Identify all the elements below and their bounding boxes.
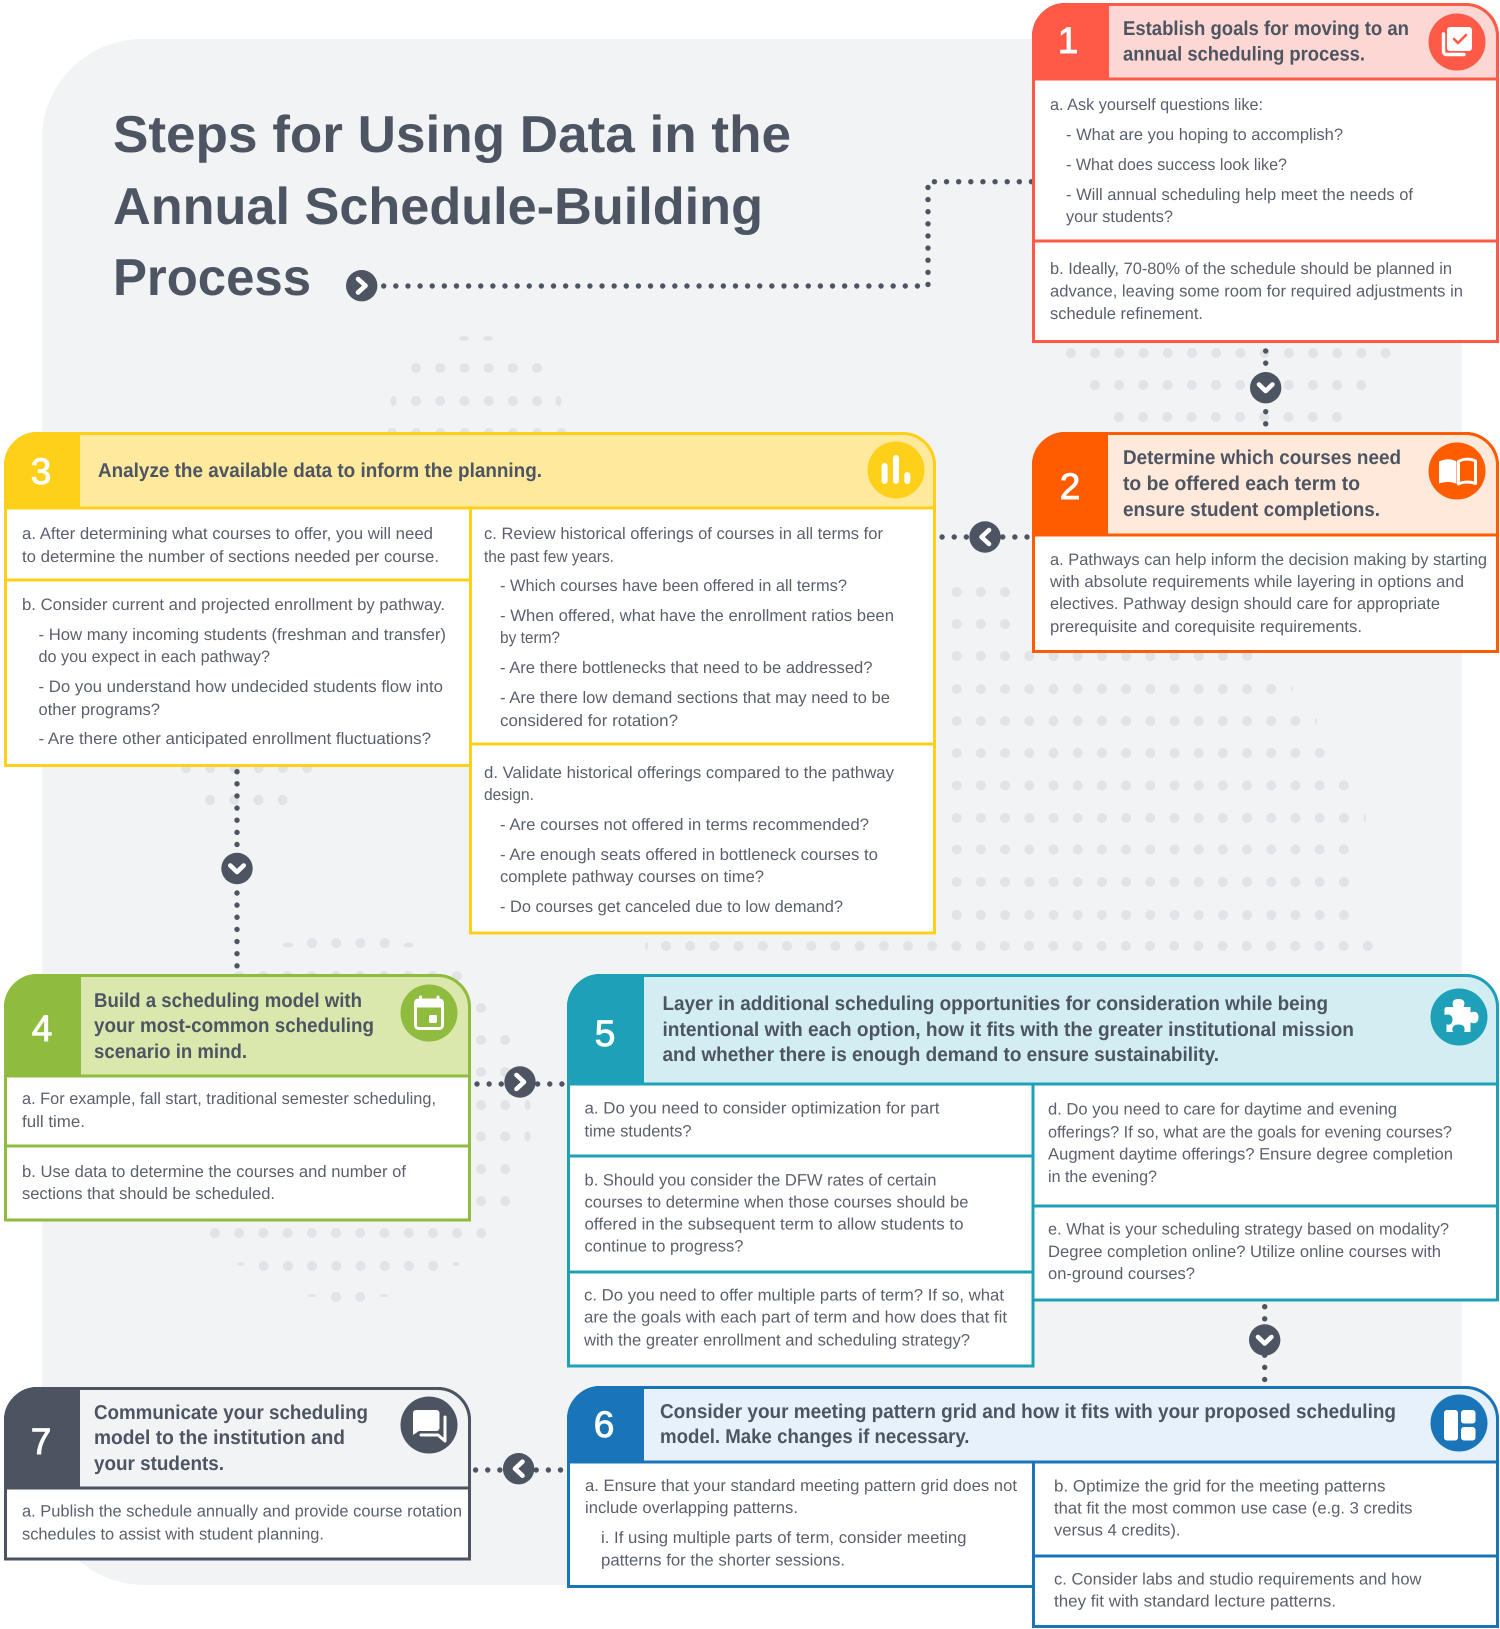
step 3 text d (484, 764, 895, 916)
step 1 text a: - What are you hoping to accomplish? (1066, 126, 1343, 144)
step 5 heading (662, 993, 1354, 1066)
step 4 heading (94, 990, 374, 1063)
step 1 number block (1034, 4, 1108, 79)
step 5 text d: Augment daytime offerings? Ensure degree completion (1048, 1146, 1453, 1164)
arrow: step 5 to step 6 (1249, 1307, 1280, 1380)
step 5 text e: e. What is your scheduling strategy based on modality? (1048, 1220, 1449, 1238)
step 5 text d (1048, 1100, 1453, 1186)
step 1 frame (1034, 4, 1498, 342)
step 3 text c (484, 525, 894, 730)
step 1 number: 1 (1058, 20, 1078, 61)
step 3 text a: to determine the number of sections needed per course. (22, 548, 439, 566)
title (113, 106, 791, 307)
step 6 header band (568, 1388, 1498, 1462)
step 4 text b (22, 1163, 406, 1203)
step 6 text a: patterns for the shorter sessions. (601, 1552, 845, 1570)
step 6 text b: that fit the most common use case (e.g. 3 credits (1054, 1500, 1412, 1518)
panel: step 7 (6, 1388, 470, 1559)
step 3 text c: - Are there low demand sections that may need to be (500, 689, 890, 707)
step 3 text d: - Are courses not offered in terms recommended? (500, 816, 869, 834)
step 6 text c (1054, 1570, 1422, 1610)
step 5 frame (568, 976, 1498, 1366)
step 2 header band (1034, 434, 1498, 535)
title: Steps for Using Data in the (113, 106, 791, 164)
step 4 frame (6, 976, 470, 1220)
step 7 frame (6, 1388, 470, 1559)
panel: step 3 (6, 434, 934, 933)
step 6 number: 6 (594, 1404, 614, 1445)
step 1 text b: advance, leaving some room for required adjustments in (1050, 283, 1463, 301)
step 7 heading (94, 1402, 368, 1475)
step 3 text b (22, 596, 446, 748)
step 3 text c: c. Review historical offerings of courses in all terms for (484, 525, 883, 543)
step 5 number: 5 (595, 1013, 615, 1054)
step 3 text d: - Are enough seats offered in bottleneck courses to (500, 846, 878, 864)
step 2 heading: Determine which courses need (1123, 447, 1401, 469)
step 1 text a: your students? (1066, 208, 1173, 226)
step 1 heading (1123, 18, 1409, 66)
step 5 heading: intentional with each option, how it fits with the greater institutional mission (662, 1019, 1354, 1041)
step 4 text b: b. Use data to determine the courses and number of (22, 1163, 406, 1181)
arrow: step 3 to step 4 (221, 772, 253, 967)
step 5 header band (568, 976, 1498, 1084)
step 3 text b: - Do you understand how undecided students flow into (38, 678, 443, 696)
arrow: step 6 to step 7 (475, 1453, 560, 1484)
step 6 text b: b. Optimize the grid for the meeting patterns (1054, 1478, 1386, 1496)
step 3 text c: the past few years. (484, 548, 614, 566)
step 4 number block (6, 976, 80, 1076)
step 2 heading: ensure student completions. (1123, 499, 1380, 521)
step 7 text a: schedules to assist with student planning. (22, 1526, 324, 1544)
step 5 text b: continue to progress? (584, 1238, 744, 1256)
step 7 heading: model to the institution and (94, 1427, 345, 1449)
step 5 text e: on-ground courses? (1048, 1265, 1195, 1283)
icon: checked copy (1428, 14, 1486, 70)
step 5 text c: are the goals with each part of term and how does that fit (584, 1308, 1007, 1326)
step 3 text b: do you expect in each pathway? (38, 648, 270, 666)
step 6 text a (585, 1477, 1017, 1570)
step 5 text d: in the evening? (1048, 1168, 1157, 1186)
step 1 heading: annual scheduling process. (1123, 44, 1365, 66)
step 5 number block (568, 976, 642, 1084)
step 2 frame (1034, 434, 1498, 652)
step 5 text e (1048, 1220, 1449, 1283)
step 4 number: 4 (32, 1008, 52, 1049)
step 3 heading: Analyze the available data to inform the planning. (98, 460, 542, 482)
step 5 text a: time students? (584, 1122, 692, 1140)
step 6 text c: c. Consider labs and studio requirements and how (1054, 1570, 1422, 1588)
step 4 text a: full time. (22, 1113, 85, 1131)
step 7 number: 7 (31, 1421, 51, 1462)
step 3 text d: d. Validate historical offerings compared to the pathway (484, 764, 895, 782)
step 5 text d: d. Do you need to care for daytime and evening (1048, 1100, 1397, 1118)
panel: step 2 (1034, 434, 1498, 652)
step 1 text a: - What does success look like? (1066, 156, 1287, 174)
step 4 header band (6, 976, 470, 1076)
step 4 text b: sections that should be scheduled. (22, 1185, 275, 1203)
icon: bar chart (868, 442, 924, 498)
step 7 header band (6, 1388, 470, 1488)
step 3 header band (6, 434, 934, 508)
step 4 heading: Build a scheduling model with (94, 990, 362, 1012)
step 5 text c: c. Do you need to offer multiple parts of term? If so, what (584, 1286, 1004, 1304)
step 5 text a: a. Do you need to consider optimization for part (584, 1100, 940, 1118)
panel: step 1 (1034, 4, 1498, 342)
arrow: step 4 to step 5 (477, 1066, 563, 1098)
step 5 text b: courses to determine when those courses should be (584, 1194, 968, 1212)
panel: step 4 (6, 976, 470, 1220)
title: Annual Schedule-Building (113, 178, 763, 236)
step 3 text d: design. (484, 786, 534, 804)
arrow: step 1 to step 2 (1250, 351, 1281, 424)
step 5 text b (584, 1172, 968, 1256)
step 3 text d: - Do courses get canceled due to low demand? (500, 898, 843, 916)
step 2 number: 2 (1060, 466, 1080, 507)
icon: calendar (400, 984, 458, 1042)
step 4 heading: scenario in mind. (94, 1041, 247, 1063)
step 1 text b (1050, 260, 1463, 323)
step 6 heading: Consider your meeting pattern grid and how it fits with your proposed scheduling (660, 1401, 1396, 1423)
arrow: step 2 to step 3 (942, 521, 1027, 553)
step 7 text a: a. Publish the schedule annually and provide course rotation (22, 1502, 462, 1520)
step 2 text a (1049, 551, 1487, 636)
step 3 text c: - Which courses have been offered in all terms? (500, 577, 847, 595)
step 5 text c: with the greater enrollment and scheduling strategy? (583, 1332, 970, 1350)
icon: chat bubbles (400, 1396, 458, 1454)
step 5 text b: b. Should you consider the DFW rates of certain (584, 1172, 936, 1190)
step 7 text a (22, 1502, 462, 1544)
step 2 text a: with absolute requirements while layering in options and (1049, 573, 1464, 591)
step 1 text a (1050, 96, 1413, 226)
step 6 number block (568, 1388, 642, 1462)
step 4 text a: a. For example, fall start, traditional semester scheduling, (22, 1090, 436, 1108)
title: Process (113, 249, 311, 307)
step 3 text a: a. After determining what courses to offer, you will need (22, 525, 433, 543)
icon: layout grid (1430, 1394, 1488, 1452)
step 6 text a: include overlapping patterns. (585, 1499, 798, 1517)
step 3 text d: complete pathway courses on time? (500, 868, 764, 886)
step 5 text e: Degree completion online? Utilize online courses with (1048, 1243, 1441, 1261)
step 5 text c (583, 1286, 1007, 1350)
arrow: title to step 1 (346, 182, 1034, 301)
step 2 heading (1123, 447, 1401, 521)
step 5 text b: offered in the subsequent term to allow students to (584, 1216, 964, 1234)
icon: puzzle piece (1430, 988, 1488, 1046)
step 6 text c: they fit with standard lecture patterns. (1054, 1592, 1336, 1610)
step 1 text a: - Will annual scheduling help meet the needs of (1066, 186, 1413, 204)
step 1 text b: schedule refinement. (1050, 305, 1203, 323)
step 1 header band (1034, 4, 1498, 79)
step 6 text b: versus 4 credits). (1054, 1522, 1180, 1540)
step 3 text c: considered for rotation? (500, 712, 678, 730)
step 3 text a (22, 525, 439, 566)
step 4 text a (22, 1090, 436, 1131)
step 5 text a (584, 1100, 940, 1140)
step 3 text b: other programs? (38, 701, 160, 719)
step 6 text a: i. If using multiple parts of term, consider meeting (601, 1529, 966, 1547)
step 3 text b: - How many incoming students (freshman and transfer) (38, 626, 446, 644)
step 5 text d: offerings? If so, what are the goals for evening courses? (1048, 1124, 1452, 1142)
step 2 text a: electives. Pathway design should care for appropriate (1050, 595, 1440, 613)
step 3 number: 3 (31, 451, 51, 492)
step 3 text c: - Are there bottlenecks that need to be addressed? (500, 659, 872, 677)
step 2 text a: prerequisite and corequisite requirements. (1050, 618, 1362, 636)
step 3 number block (6, 434, 78, 508)
panel: step 5 (568, 976, 1498, 1366)
background dot globes (186, 336, 1386, 1297)
step 3 text c: - When offered, what have the enrollment ratios been (500, 607, 894, 625)
step 3 text b: - Are there other anticipated enrollment fluctuations? (38, 730, 431, 748)
step 1 text a: a. Ask yourself questions like: (1050, 96, 1263, 114)
step 5 heading: Layer in additional scheduling opportunities for consideration while being (662, 993, 1328, 1015)
icon: open book (1428, 442, 1486, 500)
step 6 text a: a. Ensure that your standard meeting pattern grid does not (585, 1477, 1017, 1495)
step 1 text b: b. Ideally, 70-80% of the schedule should be planned in (1050, 260, 1452, 278)
step 6 heading (660, 1401, 1396, 1448)
step 5 heading: and whether there is enough demand to ensure sustainability. (662, 1044, 1219, 1066)
step 6 frame (568, 1388, 1498, 1626)
step 4 heading: your most-common scheduling (94, 1015, 374, 1037)
step 6 text b (1054, 1478, 1412, 1540)
step 2 number block (1034, 434, 1106, 535)
step 6 heading: model. Make changes if necessary. (660, 1426, 970, 1448)
step 3 text b: b. Consider current and projected enrollment by pathway. (22, 596, 445, 614)
step 7 heading: Communicate your scheduling (94, 1402, 368, 1424)
step 7 number block (6, 1388, 78, 1488)
step 3 frame (6, 434, 934, 933)
step 2 text a: a. Pathways can help inform the decision making by starting (1050, 551, 1487, 569)
step 1 heading: Establish goals for moving to an (1123, 18, 1409, 40)
panel: step 6 (568, 1388, 1498, 1626)
step 7 heading: your students. (94, 1453, 224, 1475)
step 3 text c: by term? (500, 629, 560, 647)
step 2 heading: to be offered each term to (1123, 473, 1360, 495)
